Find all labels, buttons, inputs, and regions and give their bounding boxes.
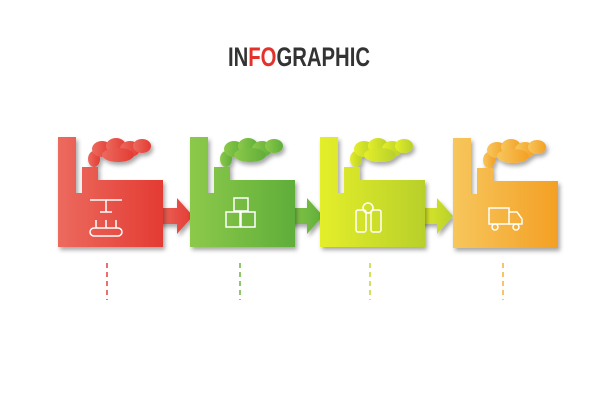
arrow 3 [415,198,453,234]
icon: bottles [356,203,381,232]
factory 4 [453,138,558,248]
arrow 1 [155,198,193,234]
icon: boxes [226,198,255,227]
factory 1 [58,137,163,247]
arrow 2 [285,198,323,234]
factory 2 [190,137,295,247]
title: INFOGRAPHIC [228,42,370,72]
icon: truck [489,208,522,230]
factory 3 [320,137,425,247]
dashed lines [107,263,503,300]
icon: conveyor [90,200,122,236]
